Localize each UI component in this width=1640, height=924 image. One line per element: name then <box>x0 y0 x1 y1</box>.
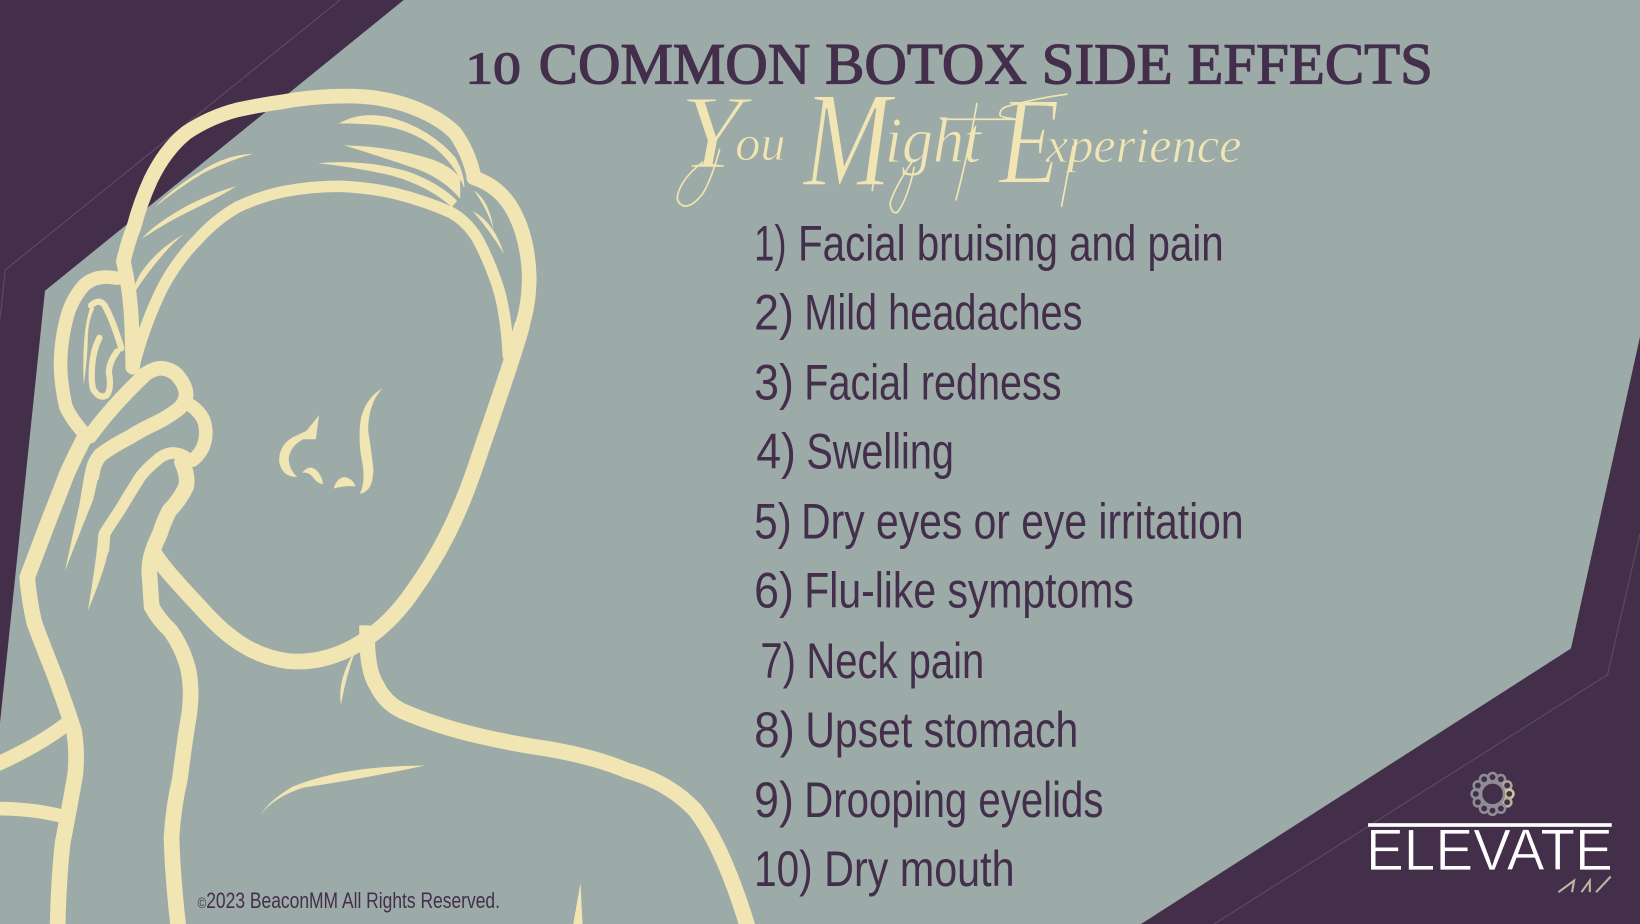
nose <box>279 415 319 477</box>
strand <box>473 211 504 254</box>
item 6: Flu-like symptoms <box>804 563 1134 619</box>
item 1: 1) <box>754 215 787 271</box>
item 3: Facial redness <box>804 355 1062 411</box>
subtitle script: xperience <box>1045 117 1242 173</box>
strand <box>133 234 184 295</box>
item 2 <box>754 284 1083 340</box>
logo top bar <box>1368 823 1612 827</box>
subtitle script: Y <box>680 74 753 190</box>
item 9: Drooping eyelids <box>804 772 1103 828</box>
illustration: woman touching face <box>0 96 749 924</box>
hair outline <box>123 96 474 367</box>
item 9: 9) <box>754 772 794 828</box>
item 3: 3) <box>754 355 794 411</box>
subtitle script: ight <box>885 105 983 177</box>
subtitle script: M <box>802 65 896 215</box>
subtitle script: E <box>997 72 1060 211</box>
item 8: Upset stomach <box>805 702 1078 758</box>
logo signature <box>1558 876 1611 892</box>
finger taper <box>65 473 98 571</box>
strand <box>344 145 460 199</box>
list of side effects <box>754 215 1244 897</box>
logo: Elevate <box>1366 773 1613 892</box>
strand <box>474 190 494 230</box>
copyright: ©2023 BeaconMM All Rights Reserved. <box>198 888 500 913</box>
title: 10 <box>465 43 521 94</box>
hairline <box>134 186 508 366</box>
item 4 <box>756 424 954 480</box>
title: COMMON BOTOX SIDE EFFECTS <box>539 32 1433 97</box>
hair strands and details <box>65 115 583 924</box>
strand <box>142 186 236 238</box>
subtitle script <box>677 65 1242 215</box>
item 5: 5) <box>754 494 792 550</box>
left lower lines <box>0 724 67 766</box>
item 3 <box>754 355 1062 411</box>
hand: first finger <box>90 368 186 476</box>
item 10: 10) <box>754 841 813 897</box>
item 2: Mild headaches <box>804 284 1083 340</box>
arm left edge <box>27 437 85 924</box>
subtitle script: ou <box>735 115 785 171</box>
item 6: 6) <box>754 563 794 619</box>
item 7: 7) <box>760 633 796 689</box>
item 4: Swelling <box>806 424 954 480</box>
logo rosette <box>1472 773 1513 815</box>
hand: third finger <box>104 453 186 549</box>
item 7: Neck pain <box>806 633 984 689</box>
item 5: Dry eyes or eye irritation <box>801 494 1244 550</box>
item 10: Dry mouth <box>824 841 1015 897</box>
face outline <box>155 326 522 662</box>
item 2: 2) <box>754 284 794 340</box>
strand <box>339 115 464 188</box>
finger taper <box>88 528 110 611</box>
hand: finger edge and forearm <box>149 462 191 924</box>
script flourishes <box>677 94 1073 213</box>
ear taper <box>83 305 94 385</box>
hand: second finger <box>191 406 206 460</box>
item 8: 8) <box>754 702 795 758</box>
ear <box>61 277 117 435</box>
item 1: Facial bruising and pain <box>798 215 1224 271</box>
chest spike <box>573 883 583 924</box>
collar bone <box>260 766 425 815</box>
item 4: 4) <box>756 424 796 480</box>
item 10 <box>754 841 1015 897</box>
neck crease <box>340 650 356 705</box>
logo wordmark: ELEVATE <box>1366 818 1613 883</box>
item 7 <box>760 633 984 689</box>
strand <box>155 154 253 207</box>
back hair <box>474 178 529 326</box>
strand <box>318 162 457 207</box>
neck and shoulder <box>367 625 749 924</box>
